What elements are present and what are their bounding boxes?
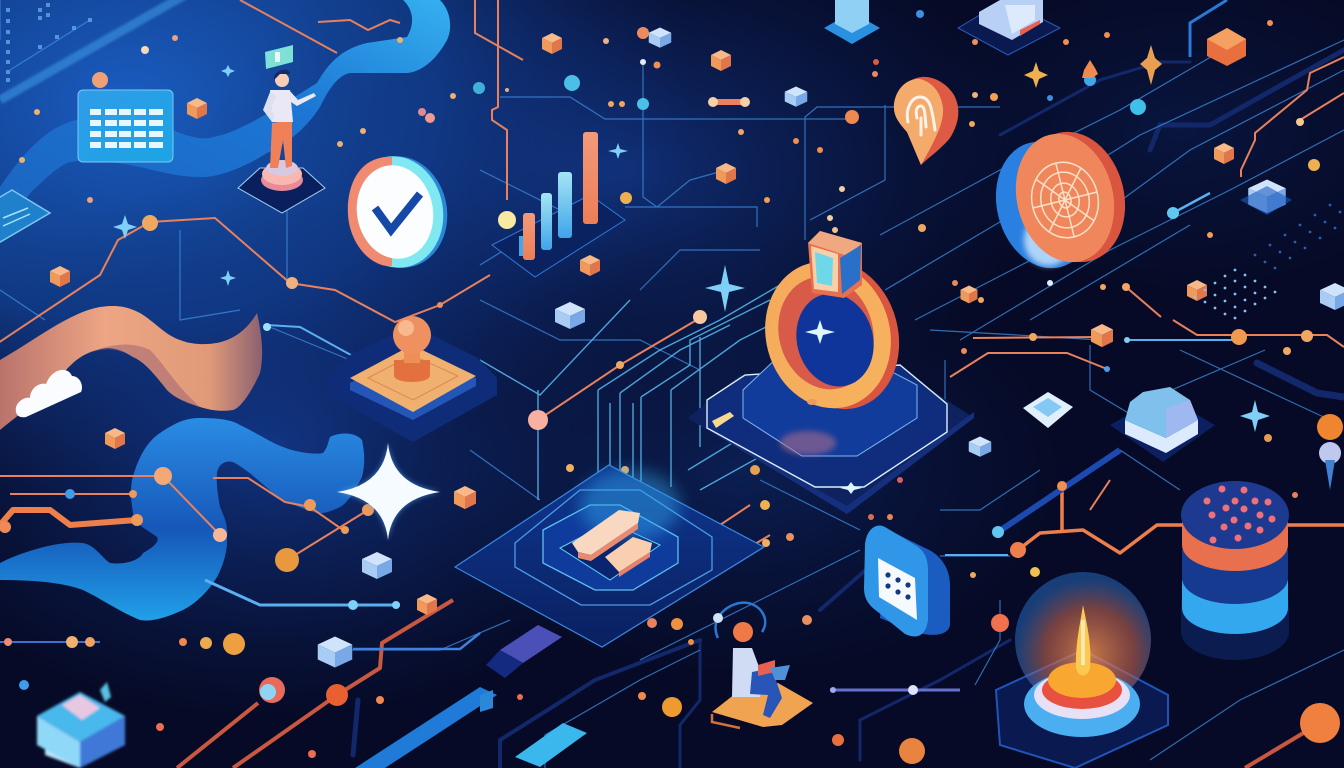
icon: blue hexagon badge	[864, 526, 950, 636]
top server blocks	[824, 0, 1246, 66]
icon: flat slab	[1023, 392, 1073, 428]
dot matrix panels	[1194, 204, 1341, 319]
icon: four-point star	[337, 443, 440, 540]
icon: peach connector bar	[708, 97, 750, 107]
wave: peach ribbon	[0, 306, 262, 430]
ring on platform	[1, 0, 974, 514]
icon: calendar panel	[78, 90, 173, 162]
dark thick traces	[353, 50, 1344, 768]
cylinder database	[1181, 481, 1289, 660]
icon: orange target disc	[983, 121, 1138, 279]
small sparkles	[113, 45, 1270, 432]
circuit lines: orange	[0, 0, 1344, 565]
dashed dot column top-left	[6, 3, 92, 82]
icon: left edge screen	[0, 190, 50, 245]
cube stack: bottom left	[37, 682, 125, 768]
slabs: bottom glowing	[355, 625, 587, 768]
diamond under small cube	[1240, 186, 1292, 215]
icon: location pin	[894, 77, 958, 165]
figure: standing person on pedestal	[238, 45, 325, 213]
bar chart	[492, 132, 625, 277]
circuit line: thick orange	[0, 485, 1344, 768]
icon: check badge	[340, 149, 456, 275]
light diagonal band	[0, 0, 185, 100]
chip platform: glowing center	[455, 465, 764, 647]
wave: lower blue ribbon	[0, 418, 364, 621]
icon: stamp on platform	[328, 316, 497, 442]
figure: seated person with laptop	[712, 603, 813, 728]
wave: top blue ribbon	[0, 0, 450, 230]
flame icon on pedestal	[996, 572, 1168, 768]
circuit lines: cyan into chip	[480, 285, 800, 510]
icon: cloud	[16, 370, 82, 417]
server block: right	[1110, 387, 1215, 462]
